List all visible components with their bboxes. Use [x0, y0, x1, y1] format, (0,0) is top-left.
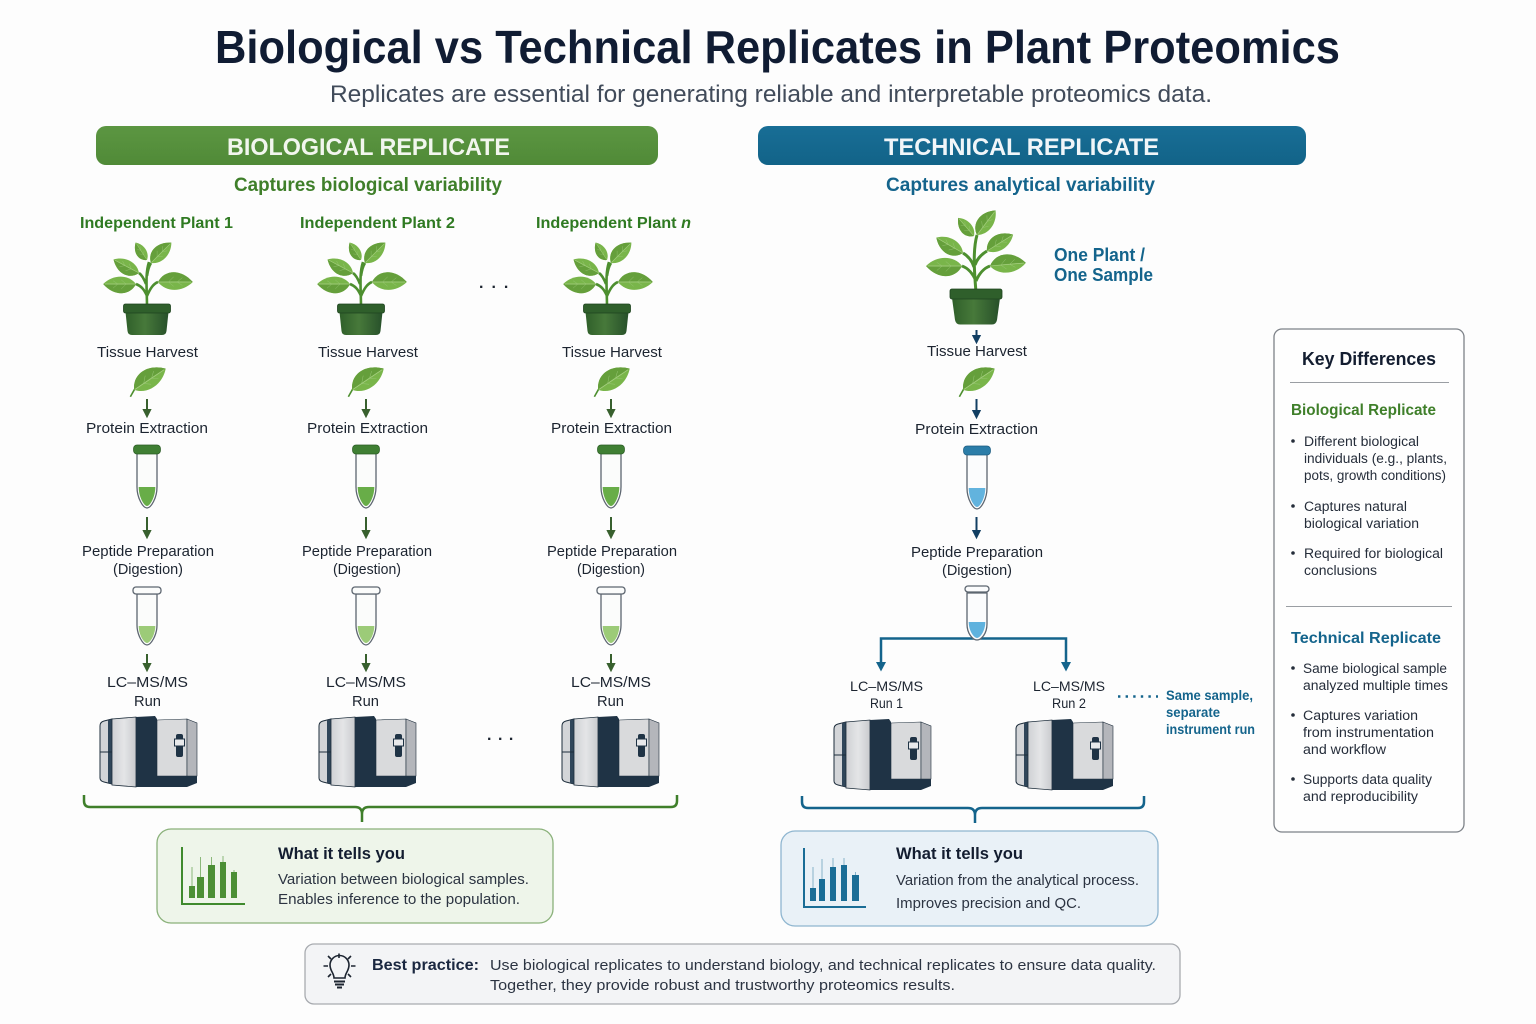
ellipsis between plants: ...	[479, 275, 516, 292]
bullet 3: Supports data quality	[1303, 772, 1432, 787]
icon: leaf	[340, 360, 388, 401]
panel heading: Key Differences	[1302, 349, 1436, 369]
callout line 1: Variation between biological samples.	[278, 871, 529, 888]
step: run: Run	[597, 693, 624, 710]
label: lc-ms/ms run 1: Run 1	[870, 695, 903, 711]
arrow	[363, 399, 369, 416]
bullet 3: Required for biological	[1304, 546, 1443, 561]
bullet 2: from instrumentation	[1303, 725, 1434, 740]
bullet 3: and reproducibility	[1303, 789, 1418, 804]
callout line 2: Enables inference to the population.	[278, 891, 520, 908]
subtitle: Replicates are essential for generating reliable and interpretable proteomics data.	[330, 81, 1212, 108]
banner: technical replicate	[758, 126, 1306, 165]
label: lc-ms/ms run 1	[850, 678, 923, 711]
best practice line 1: Use biological replicates to understand biology, and technical replicates to ensure data quality.	[490, 957, 1156, 974]
plant label 1: Independent Plant 1	[80, 215, 233, 232]
step: digestion: (Digestion)	[333, 561, 401, 578]
note: same sample	[1166, 688, 1255, 737]
run 2	[1016, 678, 1113, 790]
callout line 1: Variation from the analytical process.	[896, 872, 1139, 889]
bracket: biological	[84, 795, 677, 822]
column: independent plant 2	[300, 215, 455, 787]
arrow	[363, 654, 369, 670]
bullet 2	[1291, 708, 1434, 757]
icon: potted plant 2	[317, 237, 407, 335]
label: one plant one sample: One Sample	[1054, 265, 1153, 285]
arrow	[144, 399, 150, 416]
best practice line 2: Together, they provide robust and trustworthy proteomics results.	[490, 977, 955, 994]
arrow	[144, 654, 150, 670]
step: protein extraction: Protein Extraction	[551, 420, 672, 437]
step: peptide preparation: Peptide Preparation	[302, 543, 432, 560]
arrow	[363, 517, 369, 537]
step: tissue harvest: Tissue Harvest	[927, 343, 1028, 360]
icon: mass spectrometer	[1016, 719, 1113, 790]
plant label 2: Independent Plant 2	[300, 215, 455, 232]
subheading: analytical variability: Captures analytical variability	[886, 175, 1155, 196]
bullet 1: analyzed multiple times	[1303, 678, 1448, 693]
label: one plant one sample: One Plant /	[1054, 245, 1145, 265]
run 1	[834, 678, 931, 790]
label: lc-ms/ms run 2	[1033, 678, 1105, 711]
callout heading: What it tells you	[278, 844, 405, 863]
arrow	[608, 654, 614, 670]
plant label n: Independent Plant n	[536, 215, 691, 232]
panel: biological replicate	[80, 126, 691, 923]
step: run: Run	[352, 693, 379, 710]
callout: best practice	[305, 944, 1180, 1004]
column: independent plant n	[536, 215, 691, 787]
bullet 3	[1291, 546, 1443, 578]
icon: blue bar chart	[804, 848, 866, 907]
bullet 3	[1291, 772, 1432, 804]
banner: biological replicate: BIOLOGICAL REPLICATE	[227, 134, 510, 161]
column: independent plant 1	[80, 215, 233, 787]
bullet 2: Captures variation	[1303, 708, 1418, 723]
banner: technical replicate: TECHNICAL REPLICATE	[884, 134, 1159, 161]
step: peptide preparation: Peptide Preparation	[911, 544, 1043, 561]
icon: open tube	[597, 587, 625, 645]
icon: large potted plant	[926, 205, 1027, 324]
panel: key differences	[1274, 329, 1464, 832]
step: protein extraction: Protein Extraction	[86, 420, 208, 437]
bullet 1: Different biological	[1304, 434, 1419, 449]
icon: light bulb	[324, 954, 356, 988]
icon: leaf	[951, 360, 999, 401]
arrow	[974, 399, 980, 417]
bullet 3: conclusions	[1304, 563, 1377, 578]
icon: capped tube	[352, 445, 380, 508]
icon: split arrows	[881, 638, 1066, 662]
callout heading: What it tells you	[896, 844, 1023, 863]
step: peptide preparation: Peptide Preparation	[82, 543, 214, 560]
section: technical replicate	[1291, 630, 1448, 804]
step: lc-ms/ms: LC–MS/MS	[326, 674, 406, 691]
step: tissue harvest: Tissue Harvest	[97, 344, 199, 361]
banner: biological replicate	[96, 126, 658, 165]
step: digestion: (Digestion)	[942, 562, 1012, 579]
bullet 1	[1291, 434, 1447, 483]
arrow	[608, 517, 614, 537]
title: Biological vs Technical Replicates in Plant Proteomics	[215, 21, 1340, 73]
bracket: technical	[802, 796, 1144, 823]
icon: green bar chart	[182, 847, 245, 904]
step: tissue harvest: Tissue Harvest	[562, 344, 663, 361]
section heading: Biological Replicate	[1291, 402, 1436, 419]
bullet 2: and workflow	[1303, 742, 1386, 757]
best practice label: Best practice:	[372, 957, 479, 974]
icon: arrow head right	[1061, 662, 1071, 672]
icon: leaf	[122, 360, 170, 401]
step: lc-ms/ms: LC–MS/MS	[571, 674, 651, 691]
label: lc-ms/ms run 1: LC–MS/MS	[850, 678, 923, 694]
step: digestion: (Digestion)	[577, 561, 645, 578]
icon: capped tube	[598, 445, 624, 508]
callout: what it tells you (biological)	[157, 829, 553, 923]
subheading: biological variability: Captures biological variability	[234, 175, 502, 196]
icon: mass spectrometer	[319, 716, 416, 787]
step: lc-ms/ms: LC–MS/MS	[107, 674, 188, 691]
section: biological replicate	[1291, 402, 1447, 578]
bullet 1: pots, growth conditions)	[1304, 468, 1446, 483]
icon: open tube	[133, 587, 161, 645]
note: same sample: separate	[1166, 705, 1220, 720]
step: run: Run	[134, 693, 161, 710]
dotted leader	[1118, 695, 1158, 698]
bullet 1	[1291, 661, 1448, 693]
callout line 2: Improves precision and QC.	[896, 895, 1081, 912]
step: protein extraction: Protein Extraction	[915, 421, 1038, 438]
note: same sample: Same sample,	[1166, 688, 1253, 703]
icon: mass spectrometer	[100, 716, 197, 787]
arrow	[974, 330, 980, 342]
arrow	[144, 517, 150, 537]
note: same sample: instrument run	[1166, 722, 1255, 737]
label: lc-ms/ms run 2: Run 2	[1052, 695, 1086, 711]
bullet 2	[1291, 499, 1419, 531]
bullet 2: Captures natural	[1304, 499, 1407, 514]
step: tissue harvest: Tissue Harvest	[318, 344, 419, 361]
icon: leaf	[586, 360, 634, 401]
icon: open tube	[965, 586, 989, 640]
bullet 1: Same biological sample	[1303, 661, 1447, 676]
step: digestion: (Digestion)	[113, 561, 183, 578]
icon: potted plant 1	[103, 237, 193, 335]
icon: mass spectrometer	[562, 716, 659, 787]
step: protein extraction: Protein Extraction	[307, 420, 428, 437]
callout: what it tells you (technical)	[781, 831, 1158, 926]
icon: potted plant n	[563, 237, 653, 335]
section heading: Technical Replicate	[1291, 630, 1441, 647]
icon: capped tube	[134, 445, 160, 508]
arrow	[974, 517, 980, 537]
icon: mass spectrometer	[834, 719, 931, 790]
icon: capped tube	[964, 446, 990, 509]
panel: technical replicate	[758, 126, 1306, 926]
icon: open tube	[352, 587, 380, 645]
step: peptide preparation: Peptide Preparation	[547, 543, 677, 560]
ellipsis between instruments: ...	[487, 727, 520, 744]
bullet 2: biological variation	[1304, 516, 1419, 531]
icon: arrow head left	[876, 662, 886, 672]
arrow	[608, 399, 614, 416]
bullet 1: individuals (e.g., plants,	[1304, 451, 1447, 466]
label: lc-ms/ms run 2: LC–MS/MS	[1033, 678, 1105, 694]
label: one plant one sample	[1054, 245, 1153, 285]
